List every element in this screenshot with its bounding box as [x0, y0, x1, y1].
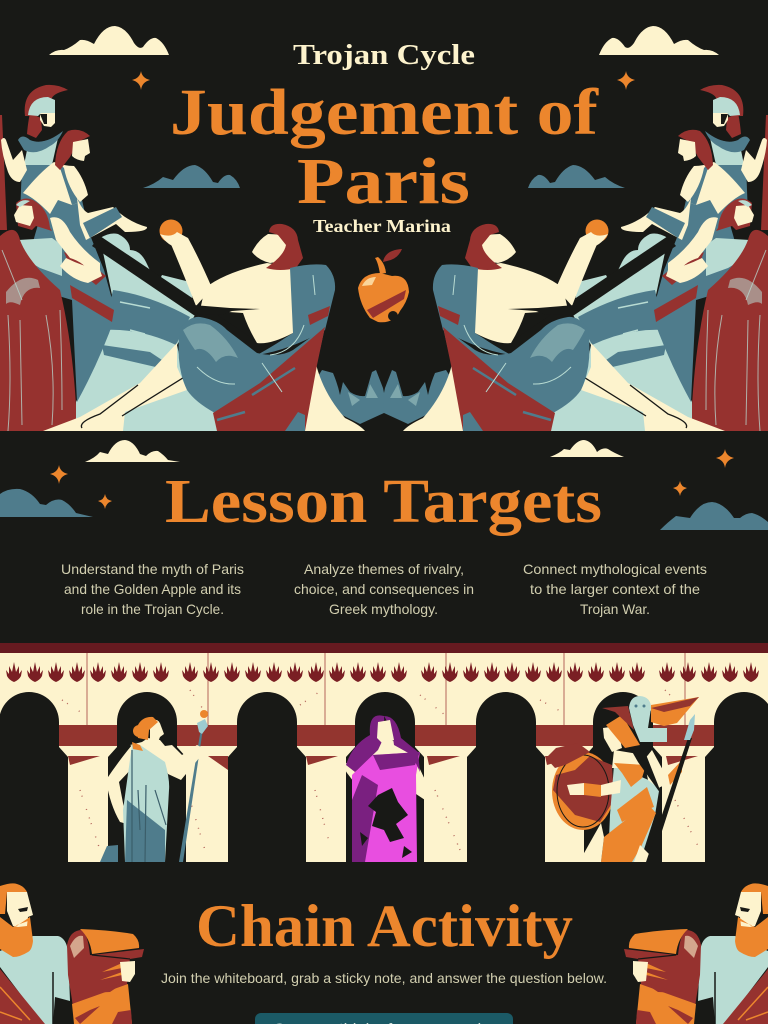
lesson target columns [61, 561, 707, 617]
title line: Judgement of: Judgement of [170, 76, 599, 149]
target 3 text: to the larger context of the [530, 581, 700, 597]
wall speckles [62, 690, 700, 850]
instruction text: Join the whiteboard, grab a sticky note, and answer the question below. [161, 970, 607, 986]
star left [132, 71, 150, 90]
target 1 text: Understand the myth of Paris [61, 561, 244, 577]
red stripe [0, 725, 768, 746]
target 2 text: Greek mythology. [329, 601, 438, 617]
figure: standing goddess with reaching arm [22, 130, 147, 402]
target 2 text: Analyze themes of rivalry, [304, 561, 464, 577]
cloud: blue right [528, 165, 625, 188]
teacher name: Teacher Marina [313, 216, 451, 236]
hero illustration: Judgement of Paris [0, 85, 768, 431]
header text block [170, 40, 599, 236]
cloud: cream right [550, 440, 624, 457]
left half of illustration [0, 85, 385, 431]
figure: seated-side goddess in red gown [0, 199, 102, 431]
target 1 text: role in the Trojan Cycle. [81, 601, 224, 617]
black diagonal staff [92, 236, 262, 358]
ground and rock drapery [76, 234, 217, 431]
figure: Paris reclining [43, 220, 385, 431]
right scholar (mirrored) [624, 883, 768, 1024]
star right [617, 71, 635, 90]
target 3 text: Connect mythological events [523, 561, 707, 577]
cloud: cream right [599, 26, 719, 55]
spear [0, 115, 7, 230]
top band [0, 643, 768, 653]
palmette row [6, 662, 759, 682]
stars [50, 449, 734, 509]
target 3 text: Trojan War. [580, 601, 650, 617]
scholar figures holding scrolls [0, 883, 768, 1024]
heading: Lesson Targets: Lesson Targets [165, 468, 602, 536]
lesson targets decorations [0, 440, 768, 530]
cloud: blue left [143, 165, 240, 188]
heading: Chain Activity: Chain Activity [196, 893, 573, 959]
header decorations: clouds and stars [49, 26, 719, 188]
target 2 text: choice, and consequences in [294, 581, 474, 597]
figure: Athena with shield, owl and spear [546, 696, 699, 862]
title line: Paris: Paris [297, 145, 470, 218]
temple wall [0, 653, 768, 862]
figure: helmeted goddess [1, 85, 68, 215]
figure: Aphrodite in magenta gown [337, 715, 437, 862]
cloud: blue left [0, 489, 93, 517]
target 1 text [61, 561, 244, 617]
arches [0, 692, 768, 862]
target 2 text [294, 561, 474, 617]
subtitle: Trojan Cycle: Trojan Cycle [293, 40, 475, 71]
cloud: cream left [49, 26, 169, 55]
target 1 text: and the Golden Apple and its [64, 581, 241, 597]
left scholar [0, 883, 144, 1024]
cloud: blue right [660, 502, 768, 530]
frieze panel: temple with arches and goddesses [0, 643, 768, 862]
target 3 text [523, 561, 707, 617]
cloud: cream left [85, 440, 180, 462]
question box [255, 1013, 513, 1024]
figure: Hera with staff [100, 710, 208, 862]
icon: golden apple [358, 249, 409, 322]
lintel marks [68, 756, 698, 770]
right half of illustration (mirrored) [383, 85, 768, 431]
